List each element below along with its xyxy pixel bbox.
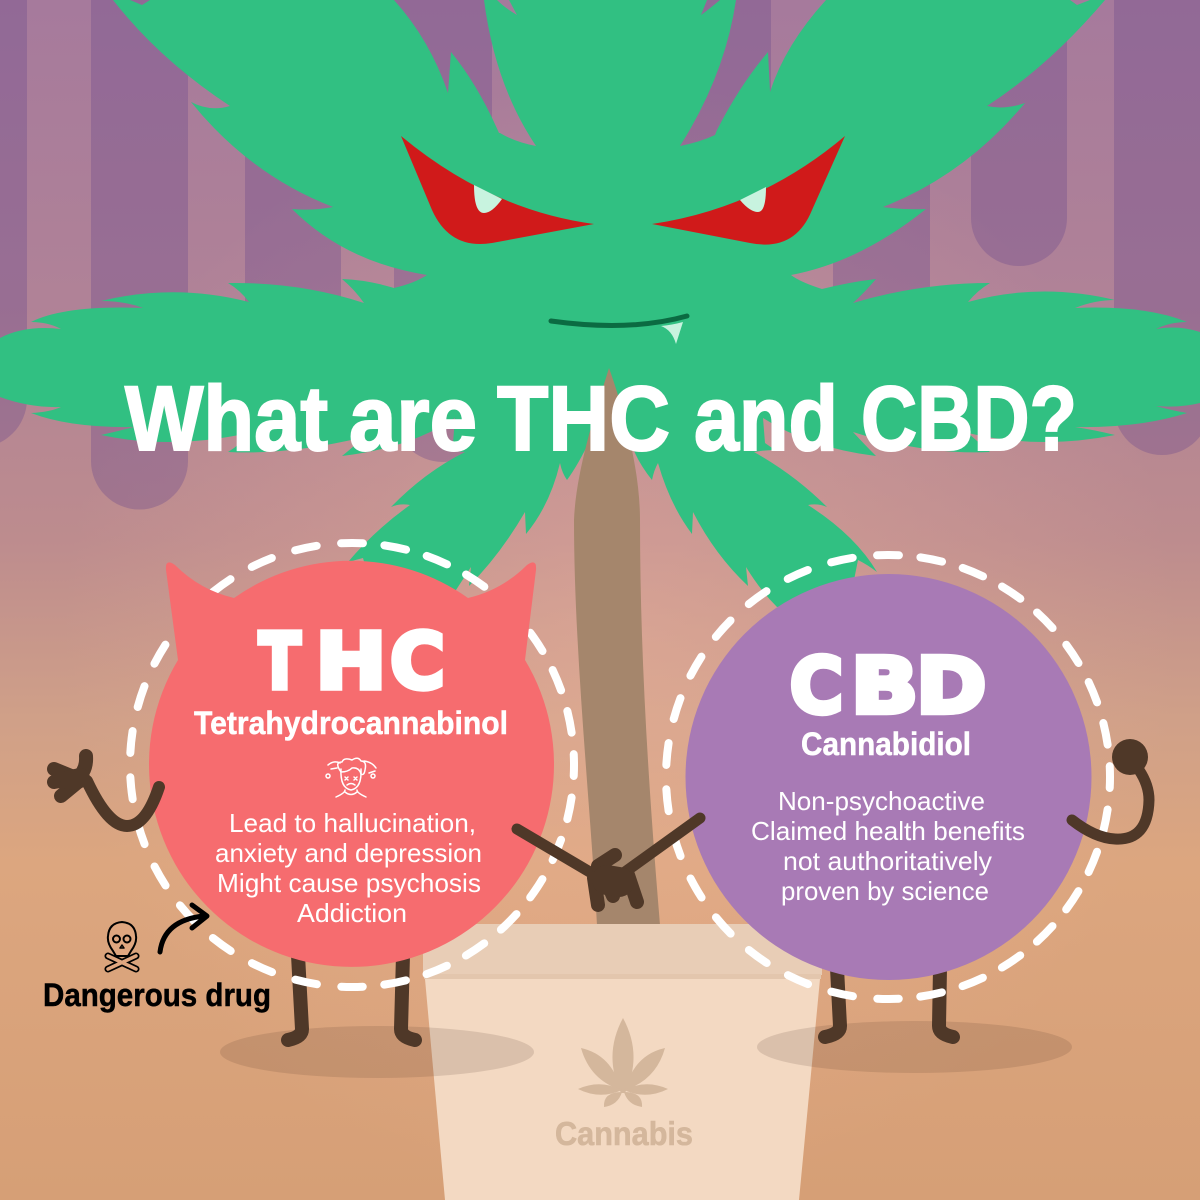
- main title: [125, 368, 1077, 470]
- plant pot: [423, 924, 822, 1200]
- background purple columns: [0, 0, 1200, 510]
- CBD effects text: not authoritatively: [783, 846, 992, 876]
- THC heading: H: [316, 618, 386, 707]
- arrow pointing to THC: [160, 905, 207, 952]
- CBD effects text: Claimed health benefits: [751, 816, 1025, 846]
- dangerous drug label: Dangerous drug: [43, 977, 271, 1013]
- THC effects text: [215, 808, 482, 928]
- THC devil character body: [149, 561, 554, 967]
- CBD effects text: proven by science: [781, 876, 989, 906]
- CBD heading: C: [790, 642, 843, 732]
- right angry eye: [652, 136, 845, 245]
- THC ground shadow: [220, 1026, 534, 1078]
- pot label: Cannabis: [555, 1115, 693, 1152]
- THC waving arm and hand: [54, 756, 159, 826]
- main title: and: [694, 368, 838, 470]
- THC effects text: anxiety and depression: [215, 838, 482, 868]
- main title: CBD?: [861, 368, 1077, 470]
- main title: THC: [497, 368, 670, 470]
- CBD heading: B: [851, 642, 918, 732]
- icon: cannabis leaf on pot: [578, 1018, 668, 1107]
- THC effects text: Might cause psychosis: [217, 868, 481, 898]
- plant trunk: [574, 368, 660, 925]
- mouth with fang: [551, 316, 687, 344]
- left angry eye: [401, 136, 594, 244]
- CBD flexing arm and fist: [1072, 739, 1149, 839]
- CBD effects text: [751, 786, 1025, 906]
- main title: are: [349, 368, 477, 470]
- THC legs: [288, 955, 415, 1040]
- THC dashed ring: [130, 543, 574, 987]
- THC heading: T: [259, 618, 301, 707]
- THC effects text: Addiction: [297, 898, 407, 928]
- clasped arms between THC and CBD: [517, 818, 700, 905]
- CBD effects text: Non-psychoactive: [778, 786, 985, 816]
- CBD character body: [686, 574, 1092, 980]
- CBD dashed ring: [666, 555, 1110, 999]
- CBD legs: [825, 968, 953, 1037]
- CBD heading: D: [916, 642, 986, 732]
- icon: dizzy person: [326, 758, 376, 797]
- icon: skull and crossbones: [108, 922, 136, 969]
- THC heading: C: [390, 618, 445, 707]
- THC heading: [259, 618, 445, 707]
- CBD full name: Cannabidiol: [801, 726, 971, 762]
- THC effects text: Lead to hallucination,: [229, 808, 476, 838]
- cannabis plant foliage: [0, 0, 1200, 620]
- main title: What: [125, 368, 328, 470]
- CBD heading: [790, 642, 986, 732]
- CBD ground shadow: [757, 1021, 1072, 1073]
- THC full name: Tetrahydrocannabinol: [194, 705, 508, 741]
